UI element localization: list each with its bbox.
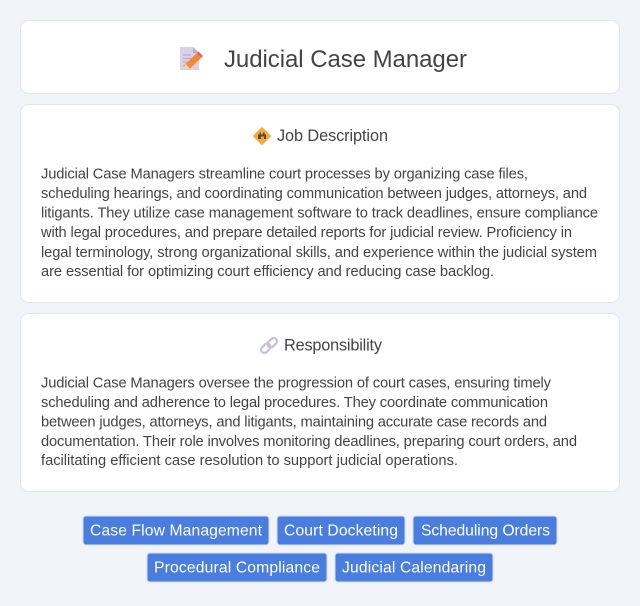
tag: scheduling orders — [413, 516, 557, 545]
text block: responsibility: Judicial Case Managers oversee the progression of court cases, ensuring timely — [41, 376, 552, 392]
icon: link — [260, 337, 278, 354]
skill tags — [83, 516, 557, 582]
tag: procedural compliance — [147, 553, 327, 582]
panel: job description — [20, 104, 620, 302]
tag: procedural compliance: Procedural Compliance — [154, 560, 320, 576]
tag: judicial calendaring — [335, 553, 493, 582]
text block: job description: legal terminology, strong organizational skills, and experience within the judicial system — [41, 245, 597, 261]
text block: responsibility: scheduling and adherence to legal procedures. They coordinate communication — [41, 395, 548, 411]
heading: responsibility: Responsibility — [284, 336, 383, 354]
tag: court docketing — [277, 516, 405, 545]
text block: job description: litigants. They utilize case management software to track deadlines, ensure compliance — [41, 206, 598, 222]
text block: responsibility: documentation. Their role involves monitoring deadlines, preparing court orders, and — [41, 434, 577, 450]
icon: memo with pencil — [180, 47, 203, 70]
text block: job description: scheduling hearings, and coordinating communication between judges, attorneys, and — [41, 186, 587, 202]
text block: responsibility: facilitating efficient case resolution to support judicial operations. — [41, 453, 458, 469]
panel: responsibility — [20, 314, 620, 492]
text block: job description: are essential for optimizing court efficiency and reducing case backlog. — [41, 264, 494, 280]
text block: job description: with legal procedures, and prepare detailed reports for judicial review. Proficiency in — [40, 225, 572, 241]
panel: title card — [20, 20, 620, 94]
tag: court docketing: Court Docketing — [284, 522, 398, 540]
tag: scheduling orders: Scheduling Orders — [421, 522, 550, 540]
title: Judicial Case Manager — [224, 46, 467, 73]
tag: judicial calendaring: Judicial Calendaring — [342, 560, 486, 576]
text block: job description: Judicial Case Managers streamline court processes by organizing case files, — [41, 166, 528, 182]
icon: orange diamond — [254, 128, 270, 144]
heading: job description: Job Description — [277, 127, 388, 145]
tag: case flow management: Case Flow Management — [90, 522, 263, 540]
text block: responsibility: between judges, attorneys, and litigants, maintaining accurate case records and — [41, 414, 547, 430]
text block: job description — [40, 166, 598, 280]
tag: case flow management — [83, 516, 269, 545]
text block: responsibility — [41, 376, 577, 469]
